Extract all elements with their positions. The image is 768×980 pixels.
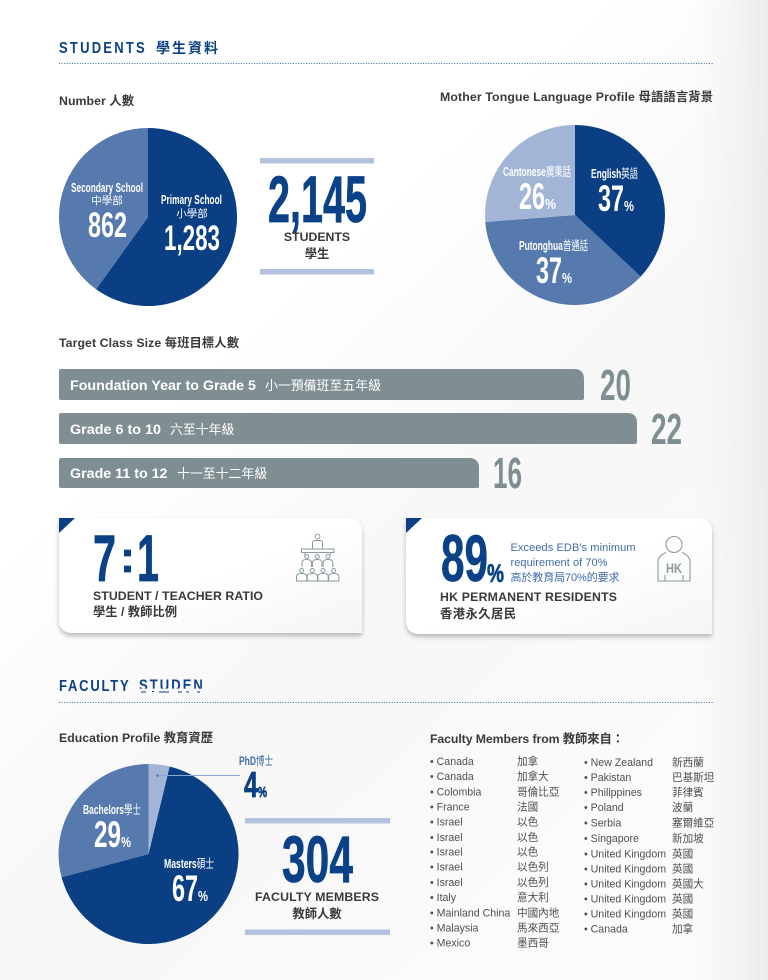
callout: phd: PhD博士 [239,754,273,768]
card: hk permanent residents [406,518,712,634]
heading: faculty members from: Faculty Members from 教師來自： [430,731,624,746]
label: secondary school: Secondary School [71,181,143,195]
total students stat: STUDENTS [284,230,350,244]
list: countries column 1: 法國 [517,800,538,814]
list: countries column 2: 新加坡 [672,832,704,845]
label: cantonese: Cantonese廣東話 [503,164,571,179]
label: masters: 67 [172,868,198,909]
label: secondary school: 862 [88,206,127,245]
list: countries column 1: 加拿大 [517,770,549,783]
list: countries column 2: 波蘭 [672,801,693,814]
label: primary school: Primary School [161,193,222,207]
pie chart: mother tongue [485,125,665,305]
list: countries column 2: • United Kingdom [584,908,666,920]
label: putonghua: % [562,270,572,287]
heading: number: Number 人數 [59,94,135,108]
list: countries column 2: • United Kingdom [584,848,666,860]
list: countries column 1: • Israel [430,816,463,828]
label: bachelors: Bachelors學士 [83,803,141,817]
list: countries column 2: 菲律賓 [672,786,704,799]
list: countries column 1: • Israel [430,832,463,844]
list: countries column 2: 加拿 [672,922,694,936]
heading: mother tongue: Mother Tongue Language Profile 母語語言背景 [440,89,713,104]
bar: grade 11 to 12: Grade 11 to 12 [70,466,168,481]
label: english [591,166,638,219]
list: countries column 1: • Mainland China [430,908,510,920]
list: countries column 2: 巴基斯坦 [672,771,715,784]
bar chart: target class size [59,361,682,498]
bar: foundation to grade 5: Foundation Year to Grade 5 [70,378,257,393]
pie chart: student number [59,128,237,306]
list: countries column 2: • Canada [584,924,628,936]
note: exceeds requirement: Exceeds EDB's minimum [510,542,636,554]
label: bachelors: % [121,834,131,851]
list: countries column 2 [584,756,715,936]
list: countries column 1: • Israel [430,846,463,858]
label: primary school [161,193,222,258]
total students stat [260,158,374,274]
section heading: students [59,40,218,57]
bar: foundation to grade 5: 20 [600,361,631,410]
list: countries column 1: • France [430,802,470,814]
list: countries column 1: • Colombia [430,786,482,798]
list: countries column 2: • United Kingdom [584,864,666,876]
card: student teacher ratio: STUDENT / TEACHER RATIO [93,589,263,603]
label: english: 37 [598,178,624,219]
list: countries column 1: 以色列 [517,860,549,874]
list: countries column 2: 英國 [672,862,693,876]
card: hk permanent residents: 香港永久居民 [440,606,516,621]
list: countries column 1: • Italy [430,892,457,904]
list: countries column 2: • Philippines [584,787,642,799]
icon: hk resident: HK [666,560,682,576]
total faculty stat: 304 [282,822,353,896]
label: putonghua: Putonghua普通話 [519,238,588,253]
list: countries column 1: • Canada [430,771,474,783]
section heading: faculty: STUDEN [139,678,203,695]
list: countries column 1: 馬來西亞 [517,922,560,934]
list: countries column 2: • Poland [584,802,624,814]
note: exceeds requirement [510,542,636,584]
label: secondary school [71,181,143,245]
list: countries column 1: 以色 [517,831,539,844]
bar: foundation to grade 5: 小一預備班至五年級 [265,378,381,393]
label: cantonese: 26 [519,176,545,217]
list: countries column 1: • Canada [430,756,474,768]
label: bachelors [83,803,141,855]
bar: grade 11 to 12 [59,449,522,498]
list: countries column 1: 墨西哥 [517,938,549,950]
list: countries column 2: 新西蘭 [672,756,704,769]
section heading: faculty: FACULTY [59,678,129,695]
list: countries column 1: 意大利 [517,891,549,904]
list: countries column 2: • United Kingdom [584,894,666,906]
pie chart: education profile [59,764,239,944]
list: countries column 1: 以色 [517,816,539,828]
card: hk permanent residents: % [487,560,504,588]
list: countries column 2: • Singapore [584,833,639,845]
bar: grade 11 to 12: 十一至十二年級 [177,466,267,481]
list: countries column 1: 中國內地 [517,906,560,920]
label: masters: % [198,888,208,905]
card: student teacher ratio: 1 [137,521,159,595]
list: countries column 1: 以色列 [517,876,549,889]
list: countries column 1: • Israel [430,877,463,889]
label: bachelors: 29 [94,814,121,855]
list: countries column 1 [430,755,560,950]
label: primary school: 1,283 [164,219,220,258]
list: countries column 1: 加拿 [517,755,539,768]
list: countries column 2: 英國 [672,908,693,920]
list: countries column 1: 以色 [517,846,539,858]
label: primary school: 小學部 [176,207,208,220]
list: countries column 2: 英國大 [672,878,704,890]
label: cantonese [503,164,571,217]
label: masters [164,857,214,909]
list: countries column 1: • Israel [430,862,463,874]
total students stat: 學生 [305,246,329,261]
list: countries column 2: 英國 [672,848,693,860]
callout: phd: 4 [244,764,258,805]
section heading: faculty [60,680,202,692]
note: exceeds requirement: requirement of 70% [510,557,608,569]
bar: grade 11 to 12: 16 [493,449,522,498]
list: countries column 1: 哥倫比亞 [517,786,560,798]
card: hk permanent residents: HK PERMANENT RESIDENTS [440,590,617,604]
card: student teacher ratio: 7 [93,521,116,595]
card: hk permanent residents: 89 [441,521,488,595]
total faculty stat: FACULTY MEMBERS [255,890,379,904]
card: student teacher ratio: 學生 / 教師比例 [93,604,177,619]
card: student teacher ratio [59,518,362,633]
heading: education profile: Education Profile 教育資歷 [59,730,213,745]
bar: grade 6 to 10: 六至十年級 [170,422,235,437]
label: putonghua [519,238,588,291]
list: countries column 1: • Mexico [430,938,470,950]
card: student teacher ratio: : [120,533,135,582]
icon: hk resident [658,536,690,581]
label: secondary school: 中學部 [91,194,123,207]
list: countries column 2: 塞爾維亞 [672,816,715,830]
callout: phd [156,754,273,805]
list: countries column 1: • Malaysia [430,922,479,934]
total faculty stat: 教師人數 [292,906,342,921]
note: exceeds requirement: 高於教育局70%的要求 [510,570,620,584]
bar: grade 6 to 10 [59,405,682,454]
list: countries column 2: • United Kingdom [584,878,666,890]
bar: grade 6 to 10: 22 [651,405,682,454]
list: countries column 2: • Pakistan [584,772,631,784]
total students stat: 2,145 [268,162,367,236]
label: masters: Masters碩士 [164,857,214,871]
section heading: students: 學生資料 [156,40,218,56]
list: countries column 2: • New Zealand [584,757,653,769]
list: countries column 2: 英國 [672,892,693,906]
bar: foundation to grade 5 [59,361,631,410]
label: putonghua: 37 [536,250,562,291]
label: english: English英語 [591,166,638,181]
section heading: students: STUDENTS [59,40,145,57]
total faculty stat [245,818,390,935]
label: english: % [624,198,634,215]
list: countries column 2: • Serbia [584,818,621,830]
bar: grade 6 to 10: Grade 6 to 10 [70,422,161,437]
icon: classroom [296,534,339,581]
heading: target class size: Target Class Size 每班目標人數 [59,335,240,350]
callout: phd: % [258,784,267,801]
label: cantonese: % [545,196,556,213]
